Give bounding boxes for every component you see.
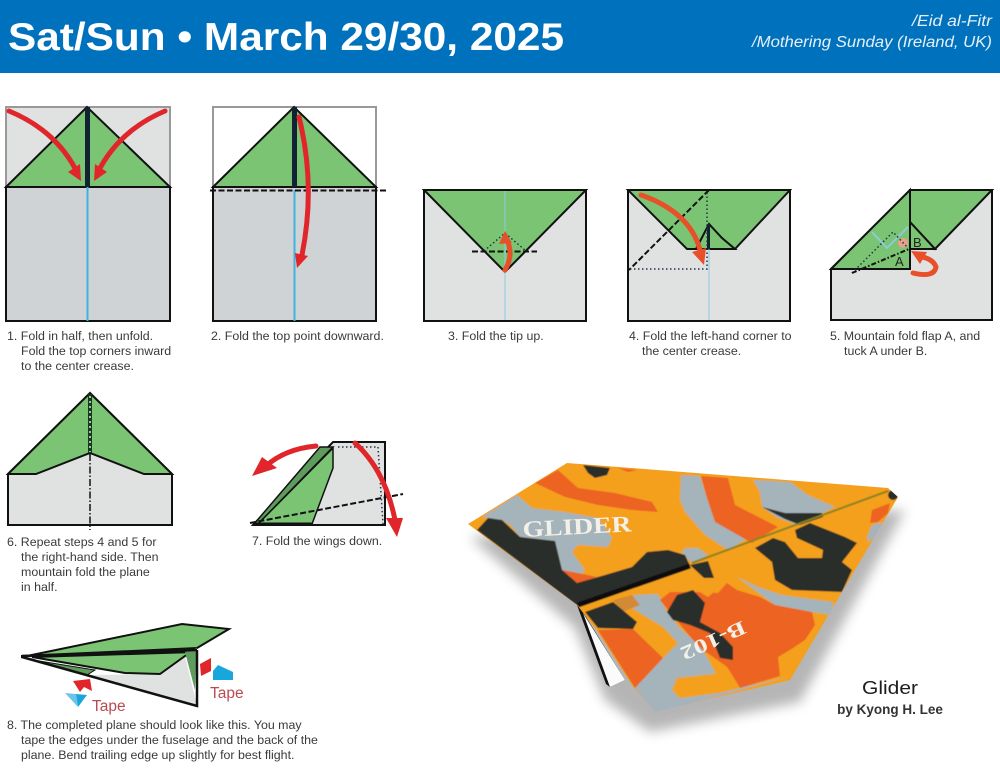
caption: step 2: 2. Fold the top point downward. (211, 329, 384, 343)
arrow: fold down (295, 117, 308, 268)
title: Sat/Sun • March 29/30, 2025 (8, 16, 564, 59)
caption: step 1: to the center crease. (21, 359, 134, 373)
caption: step 3: 3. Fold the tip up. (448, 329, 544, 343)
label: tape: Tape (210, 685, 244, 702)
caption: step 6: in half. (21, 580, 58, 594)
header banner (0, 0, 1000, 73)
white underside flap (577, 605, 625, 687)
label: B-102: B-102 (677, 616, 749, 664)
photo caption: Glider (862, 677, 918, 698)
caption: step 7: 7. Fold the wings down. (252, 534, 382, 548)
caption: step 6 (7, 535, 159, 594)
caption: step 8: 8. The completed plane should look like this. You may (7, 718, 302, 732)
caption: step 6: mountain fold the plane (21, 565, 150, 579)
caption: step 1: 1. Fold in half, then unfold. (7, 329, 153, 343)
caption: step 8 (7, 718, 318, 762)
tape marker: underside (65, 679, 126, 715)
panel: step 2 (210, 107, 387, 343)
arrow: tip up (499, 231, 512, 270)
panel: step 6 (7, 393, 172, 594)
caption: step 1: Fold the top corners inward (21, 344, 171, 358)
arrow: tuck (911, 251, 936, 275)
caption: step 4: 4. Fold the left-hand corner to (629, 329, 792, 343)
panel: step 7 (250, 442, 403, 548)
arrow: left wing down (252, 446, 316, 476)
holiday notes (751, 13, 993, 51)
photo caption: by Kyong H. Lee (837, 702, 943, 717)
arrow: right wing down (355, 443, 403, 537)
label: GLIDER: GLIDER (522, 511, 633, 542)
label: B: B (913, 235, 922, 250)
caption: step 4 (629, 329, 792, 358)
caption: step 5: tuck A under B. (844, 344, 927, 358)
caption: step 6: the right-hand side. Then (21, 550, 159, 564)
holiday notes: /Mothering Sunday (Ireland, UK) (751, 34, 992, 51)
arrow: corner to crease (641, 195, 706, 265)
orange highlights (713, 568, 727, 594)
caption: step 6: 6. Repeat steps 4 and 5 for (7, 535, 156, 549)
holiday notes: /Eid al-Fitr (911, 13, 993, 30)
caption: step 1 (7, 329, 171, 373)
label: tape: Tape (92, 698, 126, 715)
caption: step 4: the center crease. (642, 344, 741, 358)
photo caption (837, 677, 943, 717)
photo: camouflage glider (460, 455, 910, 732)
arrows: corners fold inward (9, 111, 165, 181)
panel: step 4 (628, 190, 792, 358)
caption: step 8: plane. Bend trailing edge up slightly for best flight. (21, 748, 294, 762)
panel: step 5 (830, 190, 992, 358)
caption: step 5: 5. Mountain fold flap A, and (830, 329, 980, 343)
caption: step 8: tape the edges under the fuselage and the back of the (21, 733, 318, 747)
panel: step 1 (6, 107, 171, 373)
caption: step 5 (830, 329, 980, 358)
label: A: A (895, 254, 904, 269)
panel: step 8 (7, 624, 318, 762)
tape marker: back (200, 658, 244, 702)
panel: step 3 (424, 190, 586, 343)
